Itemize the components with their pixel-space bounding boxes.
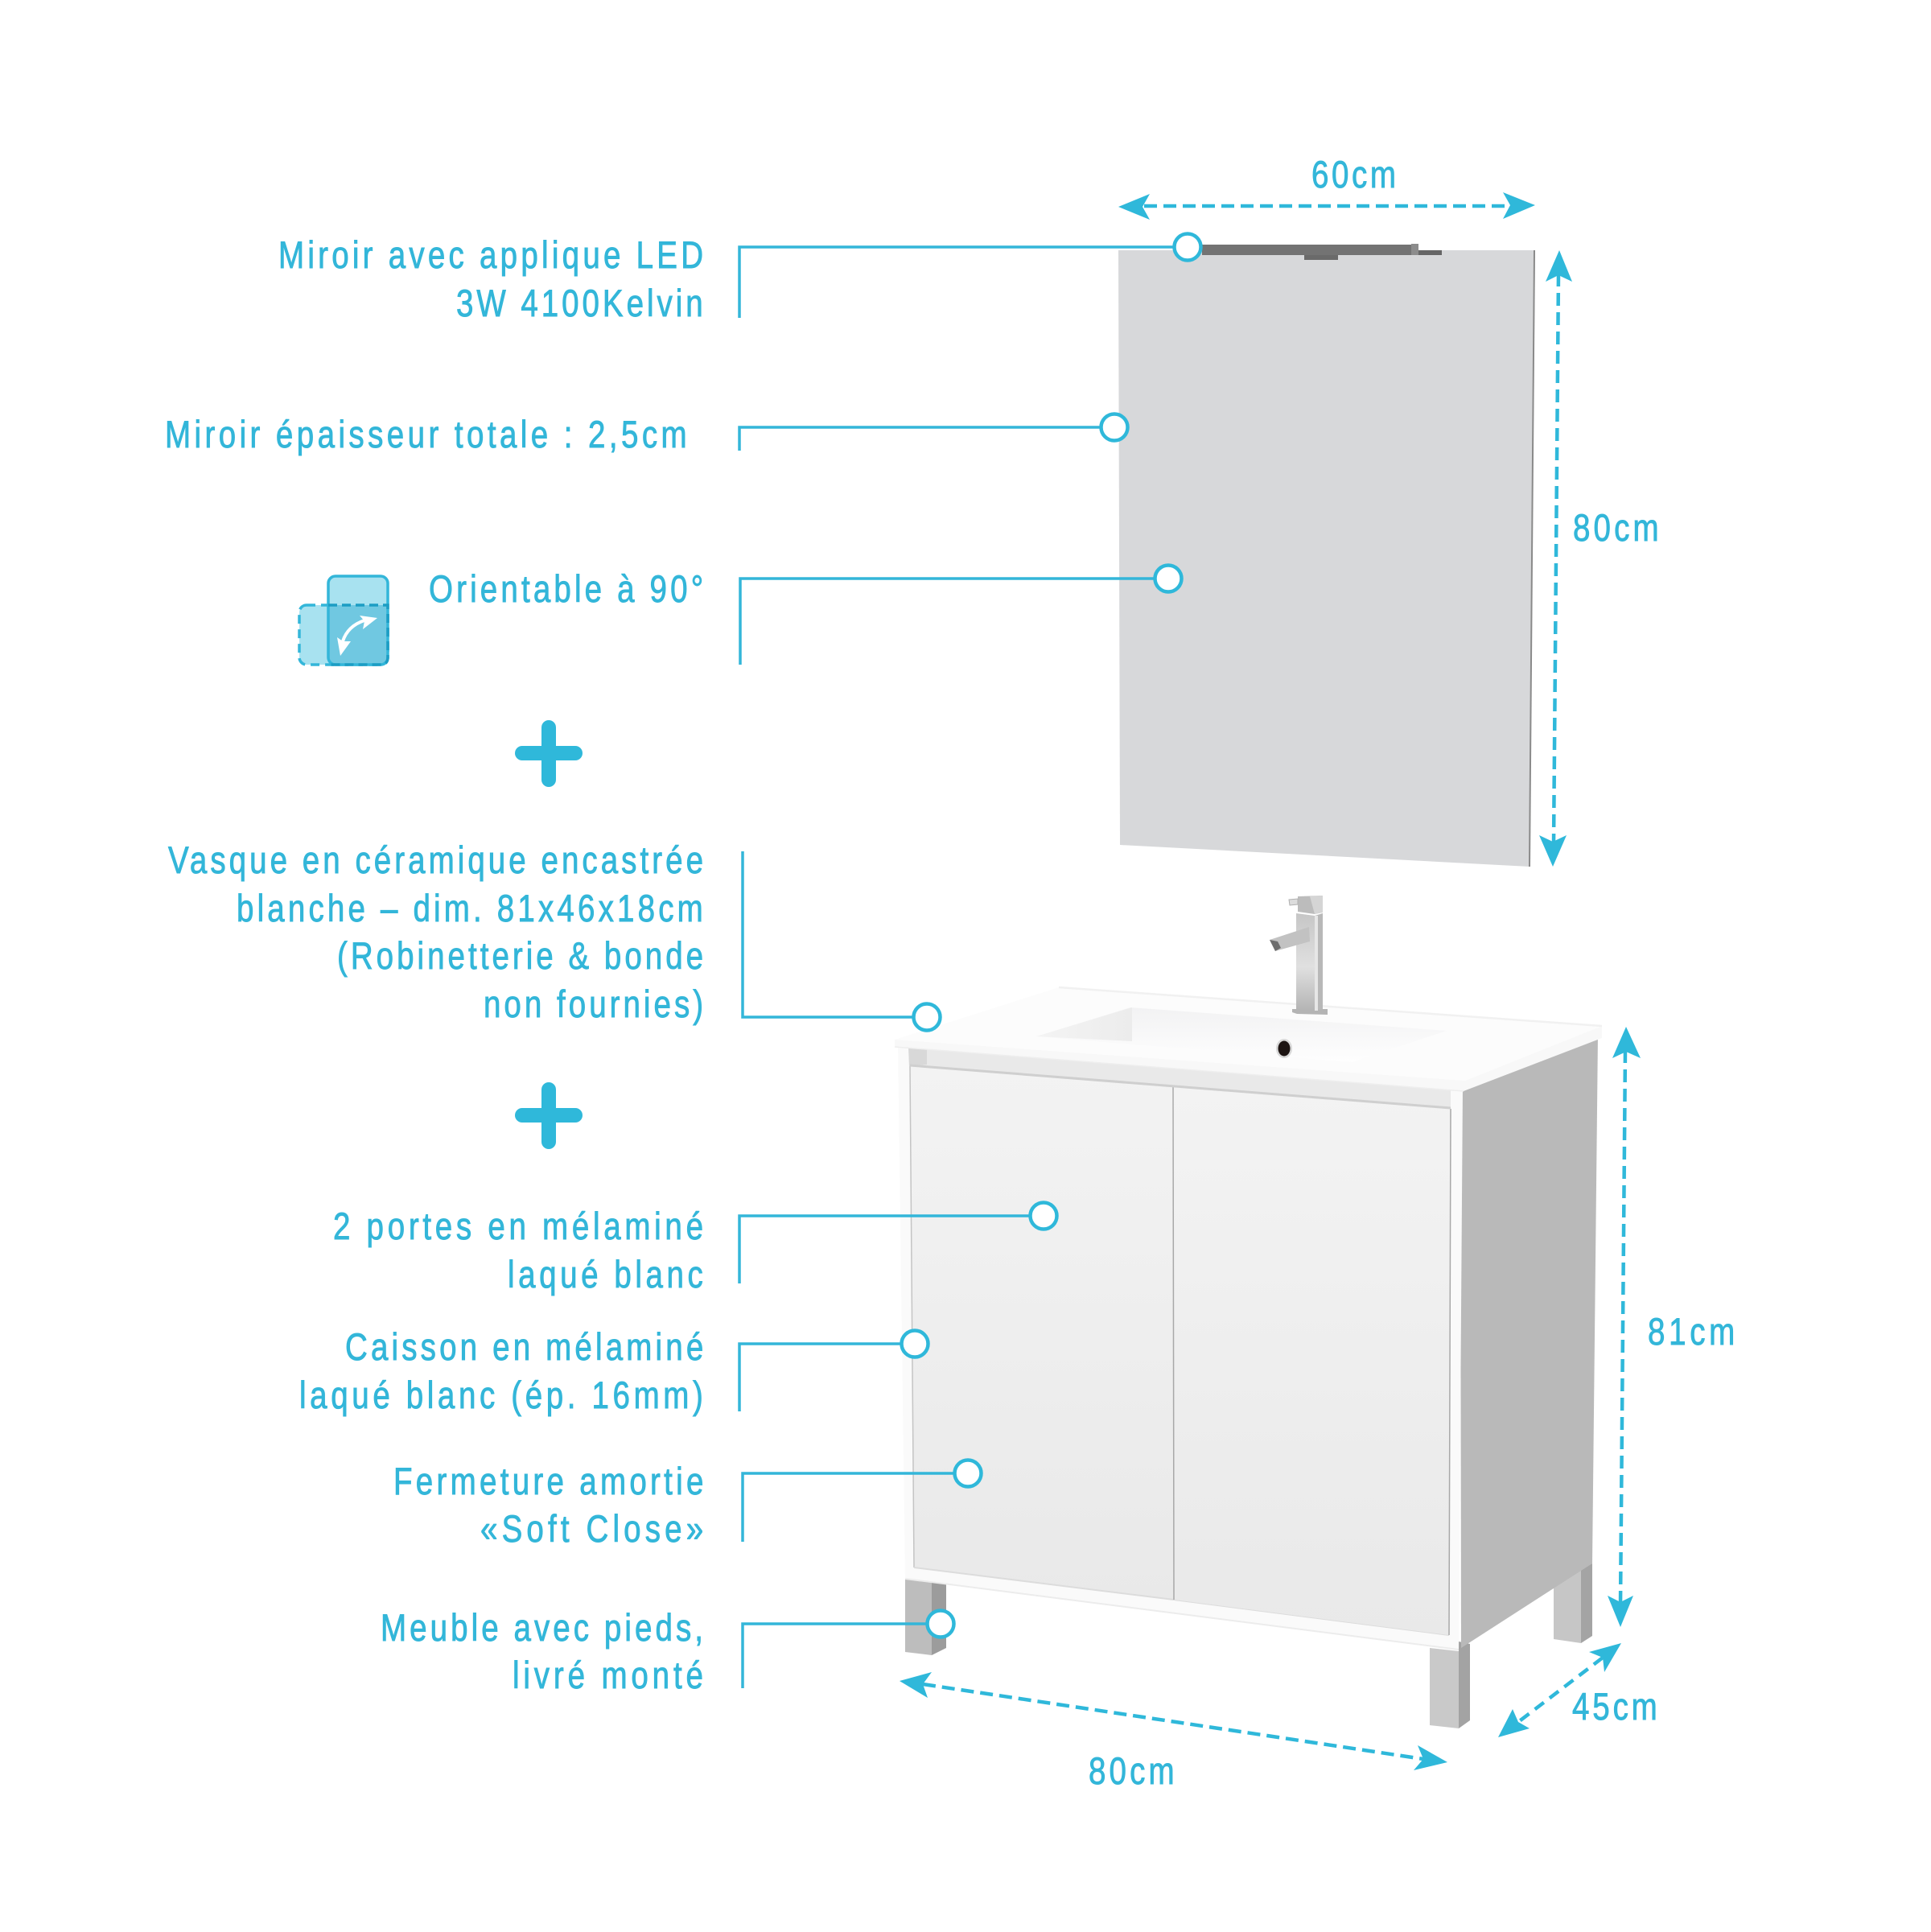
panel: mirror with LED light bbox=[1118, 244, 1535, 867]
faucet bbox=[1270, 896, 1328, 1015]
callout: miroir épaisseur: Miroir épaisseur totale : 2,5cm bbox=[165, 414, 687, 456]
icon: plus bbox=[515, 720, 583, 787]
callout: vasque: non fournies) bbox=[484, 983, 703, 1026]
drain bbox=[1276, 1039, 1292, 1058]
callout: caisson: laqué blanc (ép. 16mm) bbox=[299, 1374, 703, 1417]
dimension: cabinet width 80cm bbox=[900, 1672, 1447, 1793]
callout: portes bbox=[333, 1202, 1057, 1296]
callout: pieds: Meuble avec pieds, bbox=[381, 1607, 703, 1650]
callout: miroir LED: Miroir avec applique LED bbox=[278, 234, 703, 277]
dimension: cabinet width 80cm: 80cm bbox=[1089, 1750, 1175, 1793]
callout: miroir LED: 3W 4100Kelvin bbox=[456, 282, 703, 325]
dimension: cabinet height 81cm bbox=[1608, 1027, 1735, 1627]
dimension: mirror height 80cm: 80cm bbox=[1573, 507, 1659, 550]
dimension: mirror width 60cm bbox=[1118, 154, 1535, 220]
door: left bbox=[910, 1066, 1449, 1635]
callout: vasque bbox=[168, 839, 940, 1030]
callout: fermeture: Fermeture amortie bbox=[393, 1460, 703, 1503]
icon: plus bbox=[515, 1082, 583, 1149]
callout: fermeture bbox=[393, 1460, 982, 1551]
callout: vasque: Vasque en céramique encastrée bbox=[168, 839, 703, 882]
callout: vasque: blanche – dim. 81x46x18cm bbox=[237, 888, 703, 930]
callout: caisson: Caisson en mélaminé bbox=[345, 1326, 703, 1369]
dimension: cabinet height 81cm: 81cm bbox=[1648, 1311, 1735, 1353]
callout: miroir épaisseur bbox=[165, 414, 1128, 456]
callout: portes: laqué blanc bbox=[508, 1254, 703, 1296]
dimension: cabinet depth 45cm bbox=[1498, 1643, 1657, 1737]
callout: portes: 2 portes en mélaminé bbox=[333, 1205, 703, 1248]
leg: back right bbox=[1554, 1561, 1592, 1643]
callout: caisson bbox=[299, 1326, 928, 1417]
callout: fermeture: «Soft Close» bbox=[480, 1508, 703, 1551]
icon: rotate mirror 90 degrees bbox=[299, 576, 388, 665]
cabinet front frame bbox=[898, 1043, 1463, 1650]
callout: pieds: livré monté bbox=[513, 1654, 703, 1697]
callout: pieds bbox=[381, 1607, 954, 1697]
callout: vasque: (Robinetterie & bonde bbox=[337, 935, 703, 978]
callout: orientable bbox=[429, 565, 1181, 665]
countertop edge bbox=[895, 1026, 1602, 1091]
LED light bar bbox=[1202, 244, 1442, 260]
countertop bbox=[895, 987, 1602, 1081]
cabinet side panel bbox=[1460, 1034, 1598, 1648]
door: right bbox=[910, 1065, 1451, 1635]
leg: front right bbox=[1430, 1642, 1470, 1728]
basin bbox=[1036, 1007, 1447, 1062]
recess under basin bbox=[908, 1046, 1451, 1109]
callout: miroir LED bbox=[278, 233, 1200, 325]
dimension: mirror width 60cm: 60cm bbox=[1311, 154, 1396, 196]
callout: orientable: Orientable à 90° bbox=[429, 568, 703, 611]
dimension: cabinet depth 45cm: 45cm bbox=[1572, 1686, 1657, 1728]
mirror bbox=[1118, 250, 1535, 867]
dimension: mirror height 80cm bbox=[1539, 250, 1659, 867]
panel: vanity cabinet bbox=[895, 896, 1602, 1728]
leg: front left bbox=[905, 1579, 946, 1655]
